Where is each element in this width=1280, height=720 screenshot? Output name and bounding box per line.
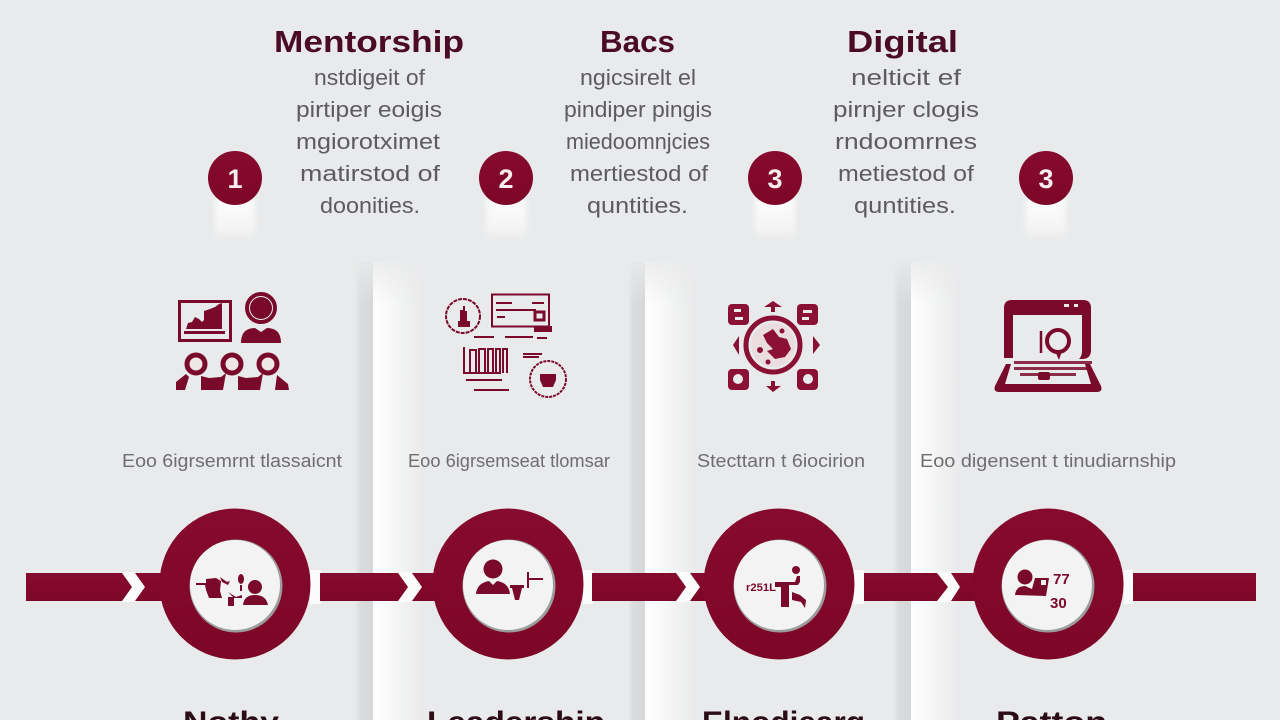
text block: Bacs description: ngicsirelt el (580, 65, 696, 90)
step ring 1 (160, 508, 310, 660)
step ring 3 (704, 508, 854, 660)
step ring 4 (972, 508, 1124, 660)
number badge 4: 3 (1038, 164, 1054, 194)
icon: ring 3 figures and gauge: r251L (746, 582, 776, 594)
heading: Bacs: Bacs (600, 24, 675, 59)
icon: ring 4 person and numbers: 77 (1053, 571, 1070, 588)
label: column 4 caption: Eoo digensent t tinudiarnship (920, 451, 1176, 471)
arrow timeline (26, 570, 1256, 604)
icon: ring 4 person and numbers (1015, 570, 1070, 612)
icon: ring 3 figures and gauge (746, 566, 806, 608)
label: column 1 caption: Eoo 6igrsemrnt tlassaicnt (122, 451, 342, 471)
step ring 2 (432, 508, 584, 660)
heading: Digital: Digital (847, 24, 958, 59)
text block: Mentorship description: mgiorotximet (296, 129, 440, 154)
text block: Bacs description: quntities. (587, 193, 688, 218)
number badge 1: 1 (227, 164, 243, 194)
icon: documents and charts (446, 294, 566, 397)
icon: laptop with lightbulb (994, 300, 1102, 392)
number badge 2 (479, 151, 533, 248)
text block: Digital description: metiestod of (838, 161, 975, 186)
text block: Bacs description: mertiestod of (570, 161, 709, 186)
number badge 3 (748, 151, 802, 248)
text block: Mentorship description: pirtiper eoigis (296, 97, 442, 122)
text block: Bacs description: miedoomnjcies (566, 129, 710, 154)
text block: Digital description: nelticit ef (851, 65, 962, 90)
number badge 2: 2 (498, 164, 514, 194)
number badge 4 (1019, 151, 1073, 248)
text block: Mentorship description (296, 65, 442, 218)
number badge 1 (208, 151, 262, 248)
text block: Mentorship description: matirstod of (300, 161, 441, 186)
icon: hub with surrounding squares (728, 301, 820, 392)
icon: ring 4 person and numbers: 30 (1050, 595, 1067, 612)
text block: Bacs description: pindiper pingis (564, 97, 712, 122)
text block: Bacs description (564, 65, 712, 218)
heading: Mentorship: Mentorship (274, 24, 464, 59)
icon: ring 1 people and tools (196, 574, 268, 606)
icon: presenter with chart and audience (176, 294, 289, 390)
text block: Digital description: rndoomrnes (835, 129, 977, 154)
label: column 2 caption: Eoo 6igrsemseat tlomsar (408, 451, 610, 471)
text block: Digital description: quntities. (854, 193, 956, 218)
text block: Digital description: pirnjer clogis (833, 97, 979, 122)
text block: Digital description (833, 65, 979, 218)
text block: Mentorship description: doonities. (320, 193, 420, 218)
icon: ring 2 person and chart (476, 560, 543, 600)
number badge 3: 3 (767, 164, 783, 194)
text block: Mentorship description: nstdigeit of (314, 65, 426, 90)
label: column 3 caption: Stecttarn t 6iocirion (697, 451, 865, 471)
